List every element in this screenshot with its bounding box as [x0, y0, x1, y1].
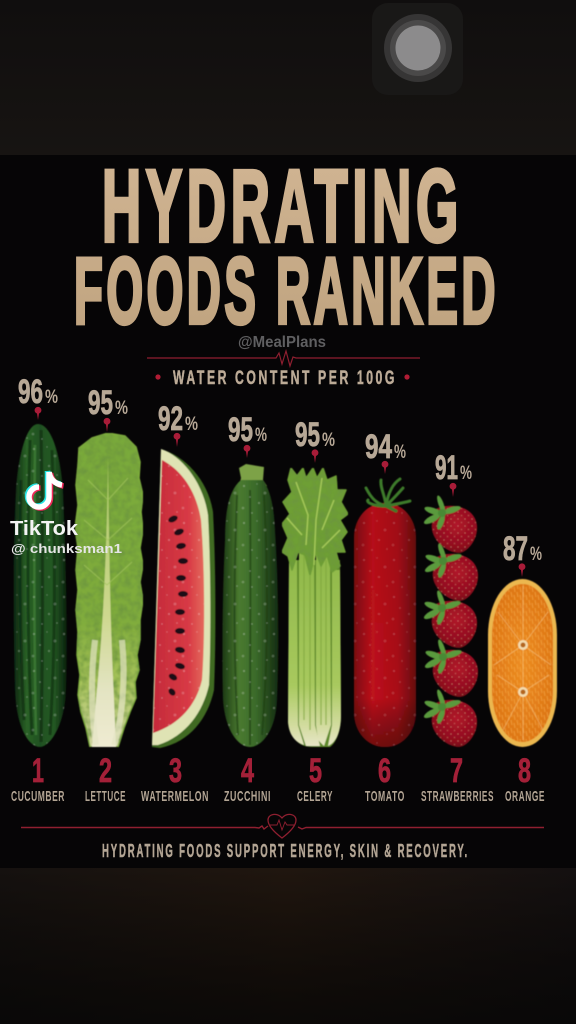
rank numbers: 4: [241, 752, 254, 790]
subtitle: water content per 100g: [155, 368, 410, 389]
95 percent lettuce: %: [115, 398, 128, 419]
celery: [282, 468, 348, 747]
orange: [488, 579, 557, 747]
rank numbers: 3: [169, 752, 182, 790]
rank numbers: 6: [378, 752, 391, 790]
rank numbers: 1: [32, 752, 44, 790]
87 percent: 87: [503, 530, 528, 568]
zucchini: [222, 464, 278, 747]
96 percent: %: [45, 387, 58, 408]
92 percent: 92: [158, 400, 183, 438]
food names: [11, 788, 545, 805]
95 percent celery: 95: [295, 416, 320, 454]
watermark handle: @MealPlans: [238, 334, 326, 351]
lettuce: [75, 433, 143, 747]
food illustrations: [14, 424, 557, 748]
96 percent: 96: [18, 373, 43, 411]
food names: CUCUMBER: [11, 788, 65, 805]
rank numbers: 8: [518, 752, 531, 790]
TikTok watermark: @ chunksman1: [11, 541, 122, 556]
food names: STRAWBERRIES: [421, 788, 494, 805]
icon: floating home button: [372, 3, 463, 95]
percentage labels and pins: [18, 373, 542, 577]
94 percent: %: [394, 442, 406, 463]
food names: CELERY: [297, 788, 333, 805]
watermelon: [152, 449, 215, 748]
94 percent: 94: [365, 428, 392, 466]
rank numbers: 5: [309, 752, 322, 790]
rank numbers: [32, 752, 531, 790]
subtitle: water content per 100g: WATER CONTENT PER 100G: [173, 368, 397, 389]
food names: LETTUCE: [85, 788, 126, 805]
91 percent: %: [460, 463, 472, 484]
strawberries: [423, 495, 478, 747]
divider with pulse: [147, 351, 420, 366]
95 percent zucchini: 95: [228, 411, 253, 449]
rank numbers: 2: [99, 752, 112, 790]
91 percent: 91: [435, 449, 458, 487]
rank numbers: 7: [450, 752, 463, 790]
87 percent: %: [530, 544, 542, 565]
divider with heart: [21, 814, 544, 838]
92 percent: %: [185, 414, 198, 435]
food names: TOMATO: [365, 788, 405, 805]
title: [74, 149, 499, 343]
95 percent lettuce: 95: [88, 384, 113, 422]
food names: WATERMELON: [141, 788, 209, 805]
95 percent celery: %: [322, 430, 335, 451]
tomato: [354, 479, 416, 747]
95 percent zucchini: %: [255, 425, 267, 446]
TikTok watermark: [10, 471, 122, 556]
cucumber: [14, 424, 67, 747]
TikTok watermark: TikTok: [10, 518, 79, 540]
icon: TikTok note: [28, 471, 64, 508]
food names: ZUCCHINI: [224, 788, 271, 805]
food names: ORANGE: [505, 788, 545, 805]
